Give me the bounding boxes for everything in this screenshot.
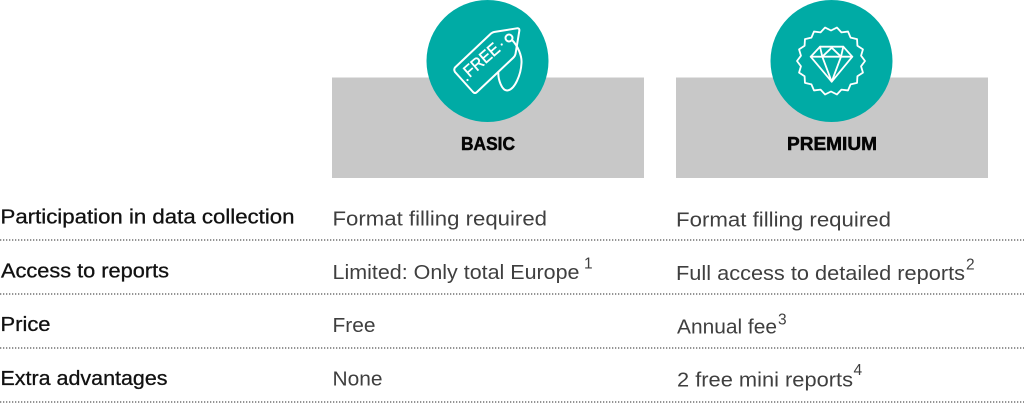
row: access to reports: 2 — [966, 256, 975, 274]
row: price — [0, 312, 787, 338]
heading: basic: BASIC — [461, 133, 515, 154]
row: participation in data collection: Format filling required — [332, 209, 547, 231]
row: access to reports: Full access to detailed reports — [676, 263, 965, 285]
row: extra advantages — [0, 362, 862, 392]
icon: free price tag: FREE — [460, 39, 504, 81]
row: access to reports: 1 — [584, 256, 593, 272]
icon: diamond badge — [770, 0, 892, 122]
row: access to reports: Limited: Only total Europe — [332, 262, 580, 284]
row: access to reports: Access to reports — [1, 260, 169, 282]
row: extra advantages: 2 free mini reports — [677, 370, 853, 392]
row: price: Free — [332, 315, 376, 337]
row: price: Annual fee — [677, 316, 777, 338]
row: price: Price — [0, 314, 51, 336]
row: extra advantages: None — [332, 369, 382, 391]
panel: premium header — [676, 78, 988, 178]
row: extra advantages: 4 — [854, 362, 862, 379]
row: participation in data collection — [0, 206, 891, 232]
row: participation in data collection: Format filling required — [676, 210, 891, 232]
row: price: 3 — [778, 312, 787, 328]
row: extra advantages: Extra advantages — [0, 368, 168, 390]
row: access to reports — [1, 256, 975, 285]
row: participation in data collection: Participation in data collection — [0, 206, 294, 228]
panel: basic header — [332, 78, 644, 178]
heading: premium: PREMIUM — [787, 133, 877, 154]
icon: free price tag — [426, 0, 548, 122]
